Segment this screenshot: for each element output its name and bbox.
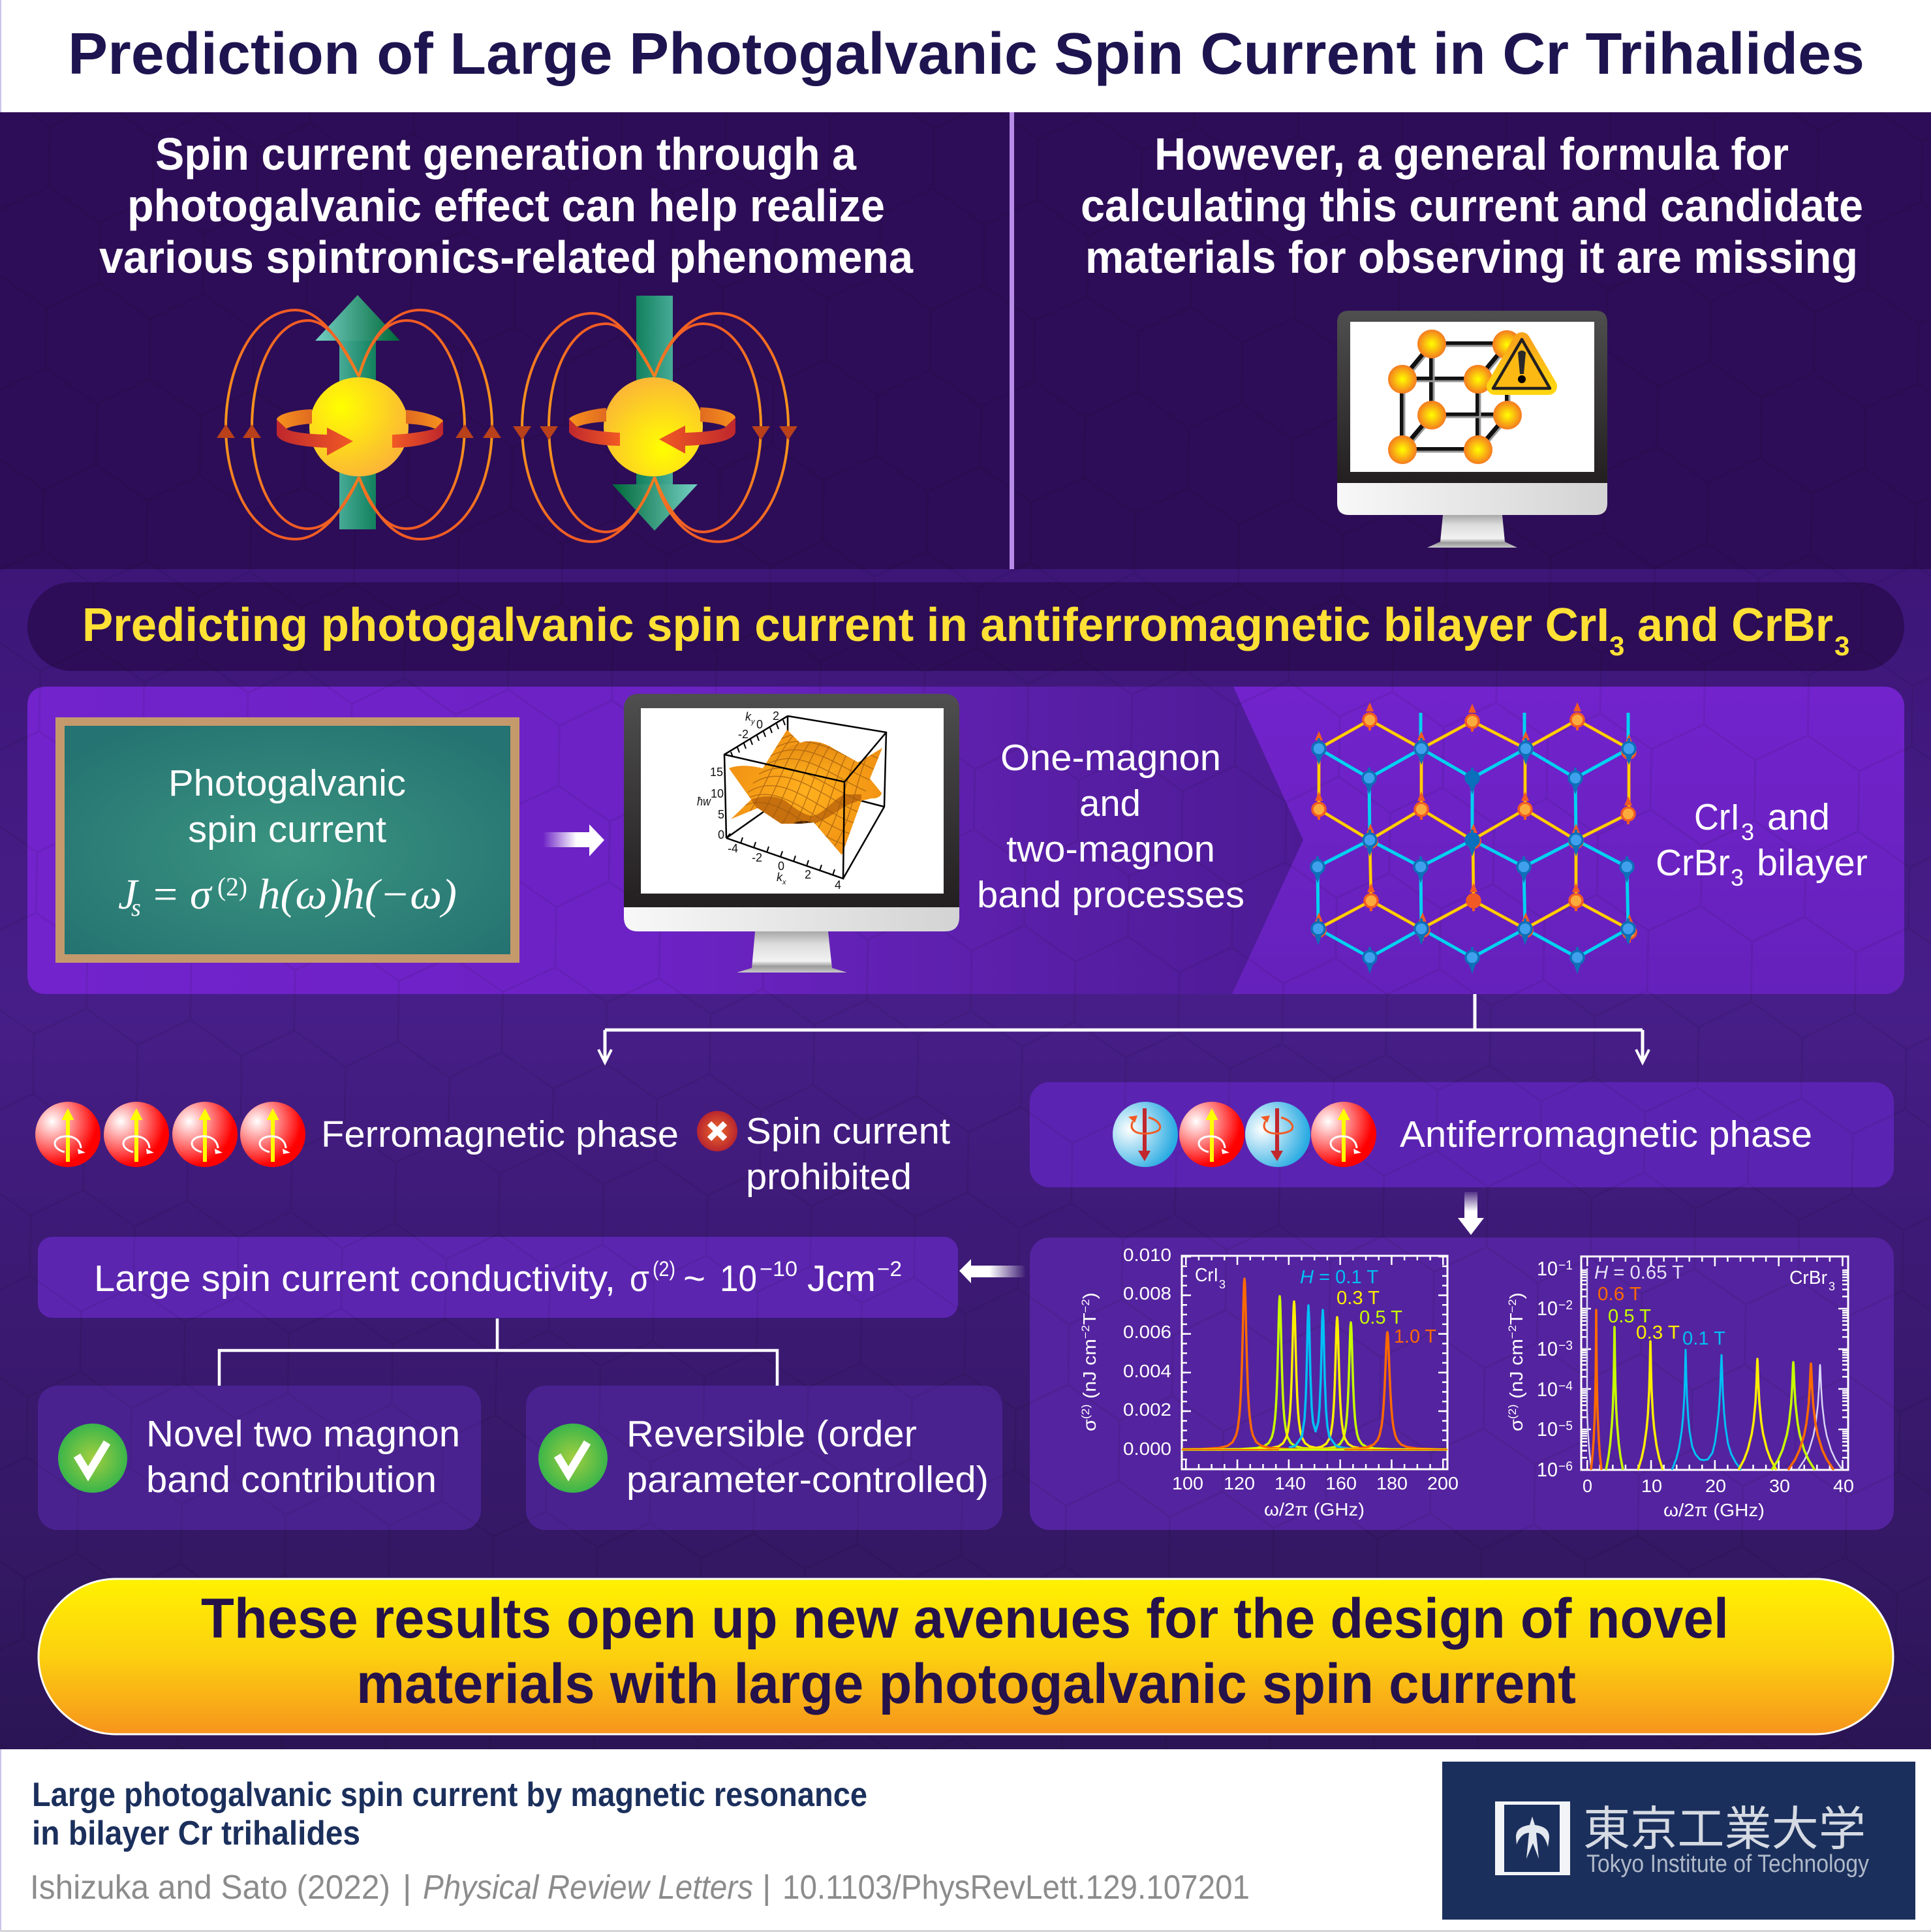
axis labels: -2 (752, 851, 762, 864)
text: reversible: Reversible (order (626, 1413, 917, 1455)
arrow: phase to charts (1458, 1192, 1484, 1235)
chalkboard heading: spin current (188, 809, 386, 850)
axis labels: k (745, 710, 751, 723)
citation: Ishizuka and Sato (2022) (30, 1869, 390, 1907)
series labels: H = 0.65 T (1594, 1262, 1684, 1283)
citation: 10.1103/PhysRevLett.129.107201 (782, 1869, 1250, 1907)
formula: (2) (217, 872, 247, 901)
text: material label: 3 (1731, 864, 1744, 891)
top dark band (0, 112, 1931, 569)
tick labels: −1 (1558, 1258, 1573, 1273)
text: material label: bilayer (1757, 842, 1868, 884)
citation: | (762, 1869, 771, 1907)
citation: Physical Review Letters (423, 1869, 753, 1907)
tick labels: 200 (1427, 1473, 1459, 1493)
series labels: 0.1 T (1682, 1328, 1725, 1349)
axis labels: 15 (710, 766, 723, 779)
x axis title: ω/2π (GHz) (1663, 1500, 1765, 1520)
series labels: 0.3 T (1636, 1322, 1680, 1343)
crystal atoms (1388, 330, 1522, 464)
text: conductivity: (2) (653, 1257, 675, 1281)
arrow: board to monitor (543, 824, 604, 856)
tick labels: 120 (1224, 1473, 1255, 1493)
text block: spin current generation: Spin current generation through a (155, 129, 857, 179)
conclusion banner: materials with large photogalvanic spin current (356, 1653, 1576, 1715)
icon: spin down magnet with field lines (513, 296, 797, 542)
y axis title: T (1079, 1313, 1100, 1325)
text: magnon band processes: One-magnon (1000, 737, 1221, 779)
tick labels: 10 (1537, 1337, 1558, 1360)
text: material label: CrBr (1656, 842, 1730, 884)
chart panel (1030, 1238, 1894, 1530)
text: conductivity: σ (630, 1258, 649, 1300)
tick labels: 0.006 (1123, 1322, 1171, 1342)
tick labels: −4 (1558, 1379, 1573, 1394)
text block: formula missing: calculating this current and candidate (1081, 180, 1863, 231)
y axis title: −2 (1506, 1299, 1519, 1313)
tick labels: 0.010 (1123, 1245, 1171, 1265)
peaks (1587, 1268, 1842, 1470)
crystal bonds (1402, 344, 1509, 452)
formula: s (131, 894, 141, 922)
text: magnon band processes: two-magnon (1006, 828, 1215, 870)
chalkboard heading (168, 762, 406, 850)
series labels: CrBr (1789, 1268, 1827, 1288)
divider (1010, 112, 1014, 569)
top process panel (27, 687, 1904, 994)
series labels: 0.5 T (1608, 1306, 1651, 1327)
axis labels: k (777, 871, 782, 884)
text: conductivity: Large spin current conductivity, (94, 1258, 615, 1300)
y axis title: (2) (1079, 1404, 1092, 1419)
series labels: 0.6 T (1598, 1284, 1641, 1305)
axis labels (697, 709, 841, 892)
tick labels: 140 (1274, 1473, 1306, 1493)
series labels (1195, 1265, 1436, 1347)
axis labels: 0 (718, 828, 724, 841)
tick labels: −3 (1558, 1339, 1573, 1353)
antiferromagnetic panel (1030, 1082, 1894, 1187)
text block: spin current generation (99, 129, 914, 283)
axis labels: 4 (835, 879, 841, 892)
chart: CrBr3 (1506, 1256, 1854, 1520)
tick labels: 0.008 (1123, 1283, 1171, 1303)
tick labels: 10 (1537, 1378, 1558, 1401)
English wordmark: Tokyo Institute of Technology (1586, 1850, 1869, 1878)
tick labels: 20 (1705, 1476, 1726, 1496)
section heading: 3 (1609, 631, 1624, 661)
section heading: and CrBr (1637, 599, 1833, 651)
text: magnon band processes: band processes (977, 874, 1244, 916)
axis labels: -2 (738, 728, 749, 741)
axis labels: 0 (756, 718, 763, 731)
series labels: H = 0.1 T (1300, 1267, 1378, 1288)
formula: σ (190, 871, 213, 918)
tick labels: 40 (1833, 1476, 1854, 1496)
axis labels: x (782, 879, 786, 886)
tick labels: 0.004 (1123, 1361, 1171, 1381)
icon: check novel (58, 1424, 127, 1493)
arrow: branching connector to phases (598, 994, 1649, 1063)
chalkboard heading: Photogalvanic (168, 762, 406, 804)
peaks (1182, 1277, 1447, 1451)
honeycomb lattice (1311, 702, 1636, 974)
tick labels: 10 (1641, 1476, 1662, 1496)
text: novel two magnon: band contribution (146, 1459, 437, 1501)
emblem (1495, 1801, 1570, 1875)
section heading: Predicting photogalvanic spin current in antiferromagnetic bilayer CrI (82, 599, 1609, 651)
conclusion banner: These results open up new avenues for the design of novel (201, 1587, 1729, 1650)
plot box front edges (724, 716, 886, 879)
axis labels: 5 (718, 808, 724, 821)
text: material label: CrI (1694, 796, 1740, 838)
text: reversible (626, 1413, 989, 1501)
y axis title: σ (1079, 1420, 1100, 1431)
text: magnon band processes: and (1079, 783, 1141, 824)
main purple background (0, 569, 1931, 1749)
icon: spin up magnet with field lines (217, 295, 501, 539)
series labels: 1.0 T (1394, 1326, 1436, 1347)
series labels: 0.3 T (1336, 1288, 1380, 1309)
axis labels: ħw (697, 795, 711, 808)
icon: check reversible (538, 1424, 608, 1493)
icon: warning triangle (1493, 339, 1550, 388)
conductivity panel (38, 1237, 958, 1318)
conclusion banner (39, 1579, 1893, 1734)
axis ticks (1586, 1259, 1848, 1467)
text block: formula missing (1081, 129, 1863, 283)
formula: J (118, 871, 139, 918)
y axis title: σ (1506, 1420, 1526, 1431)
series labels: CrI (1195, 1265, 1218, 1286)
institution logo (1442, 1762, 1915, 1920)
text: conductivity: −10 (760, 1257, 797, 1281)
text: conductivity: −2 (877, 1257, 902, 1281)
tick labels: 10 (1537, 1418, 1558, 1441)
chalkboard with formula (55, 717, 519, 963)
axis labels: 2 (805, 868, 811, 881)
icon: monitor with magnon band surface (624, 694, 959, 973)
formula: = (153, 871, 178, 918)
series labels (1594, 1262, 1835, 1349)
series labels: 0.5 T (1359, 1307, 1402, 1328)
magnon surface (729, 730, 882, 855)
y axis title: −2 (1079, 1299, 1092, 1313)
heading pill (27, 582, 1904, 671)
text: ferromagnetic phase: Ferromagnetic phase (321, 1114, 679, 1155)
tick labels: 0 (1583, 1476, 1592, 1496)
plot box back edges (726, 716, 886, 879)
text: spin current prohibited (746, 1110, 950, 1198)
text block: spin current generation: various spintronics-related phenomena (99, 232, 914, 283)
tick labels: 10 (1537, 1297, 1558, 1320)
text block: formula missing: However, a general formula for (1154, 129, 1789, 179)
text: material label (1656, 796, 1868, 891)
y axis title: −2 (1506, 1325, 1519, 1339)
text: conductivity (94, 1257, 902, 1300)
axis labels: y (750, 718, 756, 726)
axis labels: 10 (711, 787, 724, 800)
text: material label: 3 (1741, 818, 1754, 845)
novel two magnon panel (38, 1386, 481, 1530)
citation (30, 1869, 1250, 1907)
axis labels: 0 (778, 860, 784, 873)
tick labels (1123, 1245, 1459, 1493)
text block: spin current generation: photogalvanic effect can help realize (127, 180, 885, 231)
y axis title: ) (1079, 1292, 1100, 1299)
y axis title: −2 (1079, 1325, 1092, 1339)
tick labels: 30 (1769, 1476, 1790, 1496)
connector: conductivity to results (219, 1318, 777, 1386)
Japanese wordmark: 東京工業大学 (1583, 1790, 1866, 1859)
text: spin current prohibited: prohibited (746, 1156, 912, 1198)
y axis title: (2) (1506, 1404, 1519, 1419)
icon: monitor with crystal lattice and warning (1337, 311, 1607, 548)
tick labels: −6 (1558, 1459, 1573, 1474)
formula: h(ω)h(−ω) (258, 871, 457, 918)
series labels: 3 (1829, 1280, 1835, 1293)
tick labels: 10 (1537, 1458, 1558, 1481)
axis ticks (1184, 1256, 1447, 1469)
text: magnon band processes (977, 737, 1244, 916)
tick labels: 0.002 (1123, 1399, 1171, 1420)
arrow: charts to conductivity (959, 1259, 1026, 1283)
paper title (32, 1776, 867, 1852)
reversible panel (526, 1386, 1002, 1530)
blue spin sites (1311, 738, 1635, 974)
formula (118, 871, 457, 922)
icon: antiferromagnetic spins (1113, 1102, 1376, 1167)
axis labels: 2 (773, 709, 779, 723)
tick labels: 160 (1325, 1473, 1357, 1493)
tick labels: −2 (1558, 1298, 1573, 1313)
text: conductivity: Jcm (807, 1258, 876, 1300)
axis labels: -4 (728, 842, 738, 855)
title: Prediction of Large Photogalvanic Spin Current in Cr Trihalides (68, 22, 1864, 87)
tick labels (1537, 1257, 1854, 1496)
series labels: 3 (1219, 1278, 1226, 1291)
footer band (0, 1749, 1931, 1932)
y axis title: T (1506, 1313, 1526, 1325)
text block: formula missing: materials for observing it are missing (1085, 232, 1858, 283)
tick labels: 180 (1376, 1473, 1408, 1493)
text: conductivity: ~ (683, 1258, 705, 1300)
citation: | (403, 1869, 412, 1907)
tick labels: 0.000 (1123, 1439, 1171, 1459)
y axis title: (nJ cm (1079, 1339, 1100, 1404)
text: material label: and (1767, 796, 1830, 838)
paper title: in bilayer Cr trihalides (32, 1815, 360, 1852)
text: antiferromagnetic phase: Antiferromagnetic phase (1400, 1114, 1812, 1155)
tick labels: 10 (1537, 1257, 1558, 1280)
icon: ferromagnetic spins (35, 1102, 305, 1167)
paper title: Large photogalvanic spin current by magnetic resonance (32, 1776, 867, 1814)
text: spin current prohibited: Spin current (746, 1110, 950, 1152)
text: novel two magnon (146, 1413, 460, 1501)
text: conductivity: 10 (720, 1258, 757, 1300)
text: reversible: parameter-controlled) (626, 1459, 989, 1501)
icon: prohibited cross (697, 1111, 737, 1151)
chart: CrI3 (1079, 1245, 1485, 1519)
x axis title: ω/2π (GHz) (1264, 1499, 1365, 1519)
text: novel two magnon: Novel two magnon (146, 1413, 460, 1455)
tick labels: −5 (1558, 1419, 1573, 1433)
header band (0, 0, 1931, 112)
orange spin sites (1312, 702, 1636, 943)
tick labels: 100 (1172, 1473, 1203, 1493)
y axis title: (nJ cm (1506, 1339, 1526, 1404)
section heading: 3 (1834, 631, 1849, 661)
y axis title: ) (1506, 1292, 1526, 1299)
